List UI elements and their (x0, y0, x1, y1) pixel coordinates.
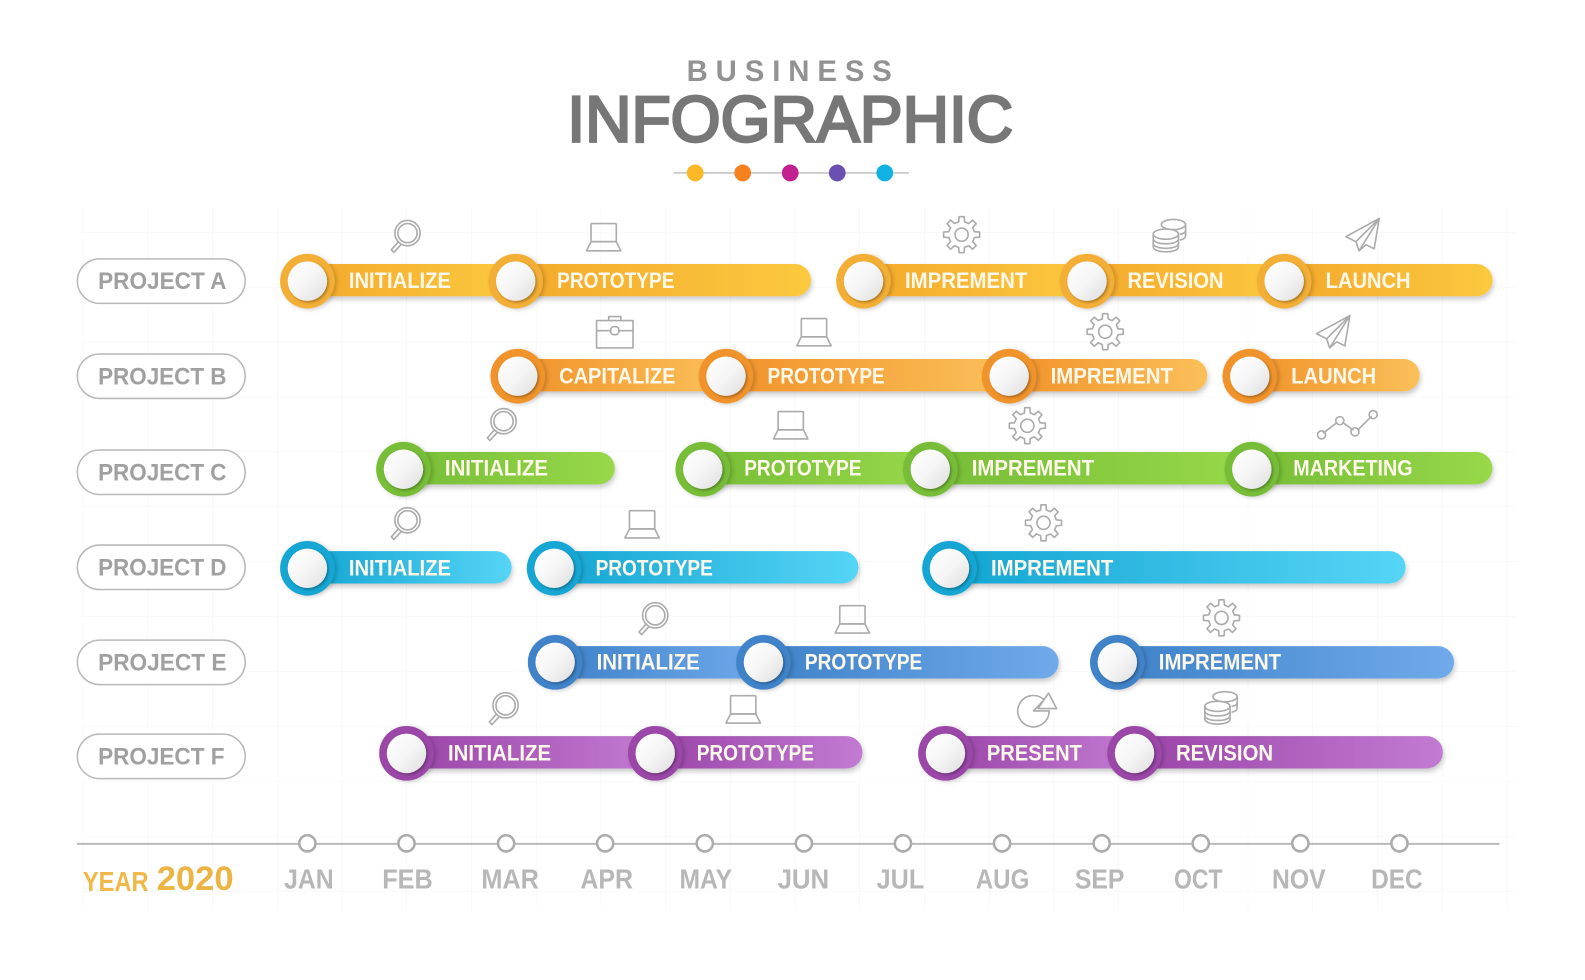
icon: laptop (797, 319, 831, 346)
bar: initialize: INITIALIZE (349, 555, 451, 580)
icon: laptop (774, 412, 808, 439)
icon: magnifier (391, 508, 420, 539)
bar: prototype: PROTOTYPE (744, 455, 862, 480)
bar: initialize (528, 635, 763, 690)
month labels: MAR (481, 863, 539, 894)
project label F (77, 734, 245, 779)
project label C (77, 450, 245, 494)
icon: pie chart (1018, 693, 1057, 727)
project label A (77, 259, 245, 303)
project label D: PROJECT D (98, 554, 227, 581)
icon: laptop (625, 511, 659, 538)
bar: imprement: IMPREMENT (991, 555, 1114, 580)
bar: imprement: IMPREMENT (972, 455, 1094, 480)
bar: initialize (280, 254, 516, 308)
year label (83, 860, 234, 898)
month labels: JUN (778, 863, 829, 894)
title (567, 55, 1013, 181)
icon: laptop (586, 224, 621, 251)
project label D (77, 545, 245, 590)
bar: marketing: MARKETING (1293, 455, 1413, 480)
heading: infographic: INFOGRAPHIC (567, 83, 1013, 156)
project label C: PROJECT C (98, 459, 227, 486)
icon: magnifier (487, 409, 516, 440)
year label: YEAR (83, 866, 149, 897)
icon: magnifier (391, 220, 420, 252)
project label A: PROJECT A (98, 268, 227, 295)
bar: revision (1107, 726, 1443, 781)
bar: launch: LAUNCH (1326, 268, 1411, 293)
project label B (77, 354, 245, 398)
bar: prototype (628, 726, 863, 781)
bar: revision: REVISION (1176, 740, 1273, 765)
panel: project F row (77, 692, 1443, 781)
bar: launch (1257, 254, 1492, 308)
icon: gear (944, 217, 980, 253)
icon: line chart (1318, 411, 1377, 439)
month labels: MAY (680, 863, 732, 894)
bar: initialize: INITIALIZE (349, 268, 451, 293)
icon: laptop (835, 606, 870, 633)
decorative colored dots (673, 165, 909, 181)
month labels (284, 863, 1423, 894)
bar: initialize: INITIALIZE (597, 649, 700, 674)
bar: present: PRESENT (987, 740, 1082, 765)
bar: initialize (376, 442, 615, 497)
background grid (81, 207, 1517, 910)
bar: initialize: INITIALIZE (445, 455, 548, 480)
bar: prototype (488, 254, 811, 308)
bar: imprement: IMPREMENT (1051, 363, 1173, 388)
bar: capitalize (490, 349, 726, 403)
icon: gear (1087, 314, 1123, 350)
bar: revision: REVISION (1127, 268, 1224, 293)
icon: gear (1026, 505, 1062, 541)
bar: imprement: IMPREMENT (905, 268, 1028, 293)
panel: project B row (77, 314, 1420, 403)
icon: gear (1009, 408, 1045, 444)
icon: coins (1205, 692, 1237, 724)
project label F: PROJECT F (98, 743, 224, 770)
bar: imprement (922, 541, 1406, 596)
month labels: DEC (1371, 863, 1423, 894)
month labels: AUG (976, 863, 1029, 894)
bar: imprement (836, 254, 1087, 308)
bar: launch: LAUNCH (1291, 363, 1376, 388)
bar: prototype (736, 635, 1059, 690)
bar: prototype: PROTOTYPE (805, 649, 922, 674)
bar: revision (1060, 254, 1284, 308)
icon: paper plane (1346, 218, 1379, 251)
bar: prototype: PROTOTYPE (557, 268, 674, 293)
bar: initialize: INITIALIZE (448, 740, 551, 765)
month labels: APR (580, 863, 633, 894)
panel: project E row (77, 600, 1454, 690)
heading: business: BUSINESS (687, 55, 892, 88)
panel: project D row (77, 505, 1406, 596)
bar: prototype (675, 442, 930, 497)
project label E (77, 640, 245, 685)
bar: prototype: PROTOTYPE (596, 555, 713, 580)
bar: imprement: IMPREMENT (1159, 649, 1282, 674)
month labels: NOV (1272, 863, 1326, 894)
project label B: PROJECT B (98, 363, 227, 390)
icon: magnifier (489, 693, 518, 725)
year label: 2020 (157, 860, 234, 898)
bar: prototype: PROTOTYPE (697, 740, 814, 765)
bar: prototype (699, 349, 1009, 403)
panel: project C row (77, 408, 1492, 497)
bar: imprement (982, 349, 1207, 403)
bar: prototype (527, 541, 858, 596)
icon: briefcase (597, 317, 633, 348)
icon: gear (1203, 600, 1239, 636)
month labels: FEB (382, 863, 433, 894)
timeline axis (77, 835, 1500, 851)
bar: launch (1222, 349, 1420, 403)
bar: imprement (1090, 635, 1454, 690)
icon: magnifier (639, 603, 668, 635)
month labels: JUL (877, 863, 924, 894)
month labels: OCT (1174, 863, 1223, 894)
bar: initialize (379, 726, 655, 781)
icon: paper plane (1317, 316, 1350, 348)
icon: laptop (726, 696, 760, 723)
icon: coins (1153, 219, 1186, 252)
bar: prototype: PROTOTYPE (767, 363, 885, 388)
panel: project A row (77, 217, 1492, 308)
bar: initialize (280, 541, 512, 596)
bar: marketing (1225, 442, 1492, 497)
month labels: JAN (284, 863, 334, 894)
month labels: SEP (1075, 863, 1124, 894)
bar: present (918, 726, 1135, 781)
project label E: PROJECT E (98, 649, 227, 676)
bar: imprement (903, 442, 1252, 497)
bar: capitalize: CAPITALIZE (559, 363, 675, 388)
